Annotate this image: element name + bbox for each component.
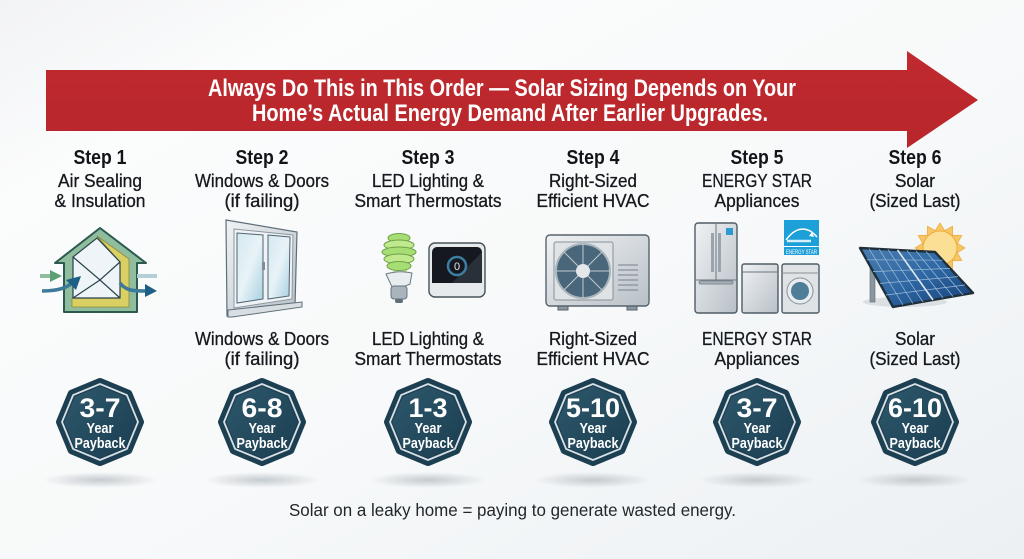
payback badge 2: Payback [236, 435, 288, 452]
footer note: Solar on a leaky home = paying to generate wasted energy. [289, 500, 736, 520]
energy star label: ENERGY STAR [786, 249, 817, 256]
air arrows [40, 270, 157, 297]
lower label 3: LED Lighting & [372, 328, 485, 349]
banner heading: Always Do This in This Order — Solar Sizing Depends on Your [208, 75, 796, 102]
payback badge 4: Payback [568, 435, 619, 452]
lower label 6: (Sized Last) [870, 348, 960, 369]
step 2 title: Windows & Doors [195, 170, 329, 191]
payback badge 1: Payback [74, 435, 126, 452]
lower label 2 [195, 328, 329, 369]
step 4 title: Right-Sized [549, 170, 637, 191]
payback badge 1: Year [86, 420, 114, 437]
payback badge 1: 3-7 [80, 393, 120, 423]
step 3 title [354, 170, 502, 211]
icon: HVAC unit [546, 235, 649, 310]
step 4 column [535, 147, 651, 488]
step 1 title: Air Sealing [58, 170, 142, 191]
icon: smart thermostat: 0 [454, 261, 460, 273]
payback badge 4: 5-10 [566, 393, 620, 423]
step 6 title: (Sized Last) [870, 190, 960, 211]
step 1 column [40, 147, 158, 488]
payback badge 5 [699, 382, 815, 488]
payback badge 5: 3-7 [736, 393, 778, 423]
icon: smart thermostat [429, 243, 485, 297]
payback badge 1 [42, 382, 158, 488]
lower label 4: Efficient HVAC [536, 348, 650, 369]
step 4 title [536, 170, 650, 211]
step 2 title [195, 170, 329, 211]
step 3 column [354, 147, 502, 488]
payback badge 6 [857, 382, 973, 488]
step 2 heading: Step 2 [236, 147, 288, 169]
step 5 title: Appliances [714, 190, 800, 211]
step 5 column [695, 147, 819, 488]
lower label 4: Right-Sized [549, 328, 637, 349]
icon: house envelope [40, 228, 157, 312]
payback badge 3: 1-3 [408, 393, 448, 423]
payback badge 2: 6-8 [242, 393, 282, 423]
icon: window [226, 220, 302, 317]
payback badge 6: 6-10 [888, 393, 942, 423]
icon: solar panel and sun [860, 223, 973, 307]
payback badge 5: Payback [732, 435, 783, 452]
payback badge 2 [204, 382, 320, 488]
step 5 heading: Step 5 [730, 147, 784, 169]
payback badge 6: Payback [890, 435, 941, 452]
step 3 heading: Step 3 [402, 147, 454, 169]
payback badge 3: Year [414, 420, 442, 437]
step 3 title: Smart Thermostats [354, 190, 502, 211]
lower label 2: (if failing) [224, 348, 300, 369]
step 4 title: Efficient HVAC [536, 190, 650, 211]
icon: appliances [695, 220, 819, 313]
lower label 6 [870, 328, 960, 369]
payback badge 3: Payback [402, 435, 454, 452]
step 6 title: Solar [895, 170, 935, 191]
step 6 column [857, 147, 973, 488]
payback badge 2: Year [248, 420, 276, 437]
step 3 title: LED Lighting & [372, 170, 485, 191]
step 1 heading: Step 1 [74, 147, 126, 169]
step 1 title: & Insulation [54, 190, 146, 211]
step 6 heading: Step 6 [888, 147, 942, 169]
lower label 5 [702, 328, 812, 369]
step 1 title [54, 170, 146, 211]
lower label 5: Appliances [714, 348, 800, 369]
payback badge 4: Year [580, 420, 607, 437]
lower label 6: Solar [895, 328, 935, 349]
lower label 3: Smart Thermostats [354, 348, 502, 369]
banner heading [208, 75, 796, 127]
lower label 5: ENERGY STAR [702, 328, 812, 349]
banner arrow [46, 51, 978, 148]
payback badge 5: Year [744, 420, 771, 437]
lower label 4 [536, 328, 650, 369]
lower label 2: Windows & Doors [195, 328, 329, 349]
payback badge 4 [535, 382, 651, 488]
step 4 heading: Step 4 [566, 147, 620, 169]
step 5 title [702, 170, 812, 211]
step 6 title [870, 170, 960, 211]
lower label 3 [354, 328, 502, 369]
step 5 title: ENERGY STAR [702, 170, 812, 191]
step 2 title: (if failing) [224, 190, 300, 211]
step 2 column [195, 147, 329, 488]
payback badge 6: Year [902, 420, 929, 437]
payback badge 3 [370, 382, 486, 488]
icon: LED bulb [382, 234, 416, 303]
banner heading: Home’s Actual Energy Demand After Earlier Upgrades. [252, 100, 768, 127]
